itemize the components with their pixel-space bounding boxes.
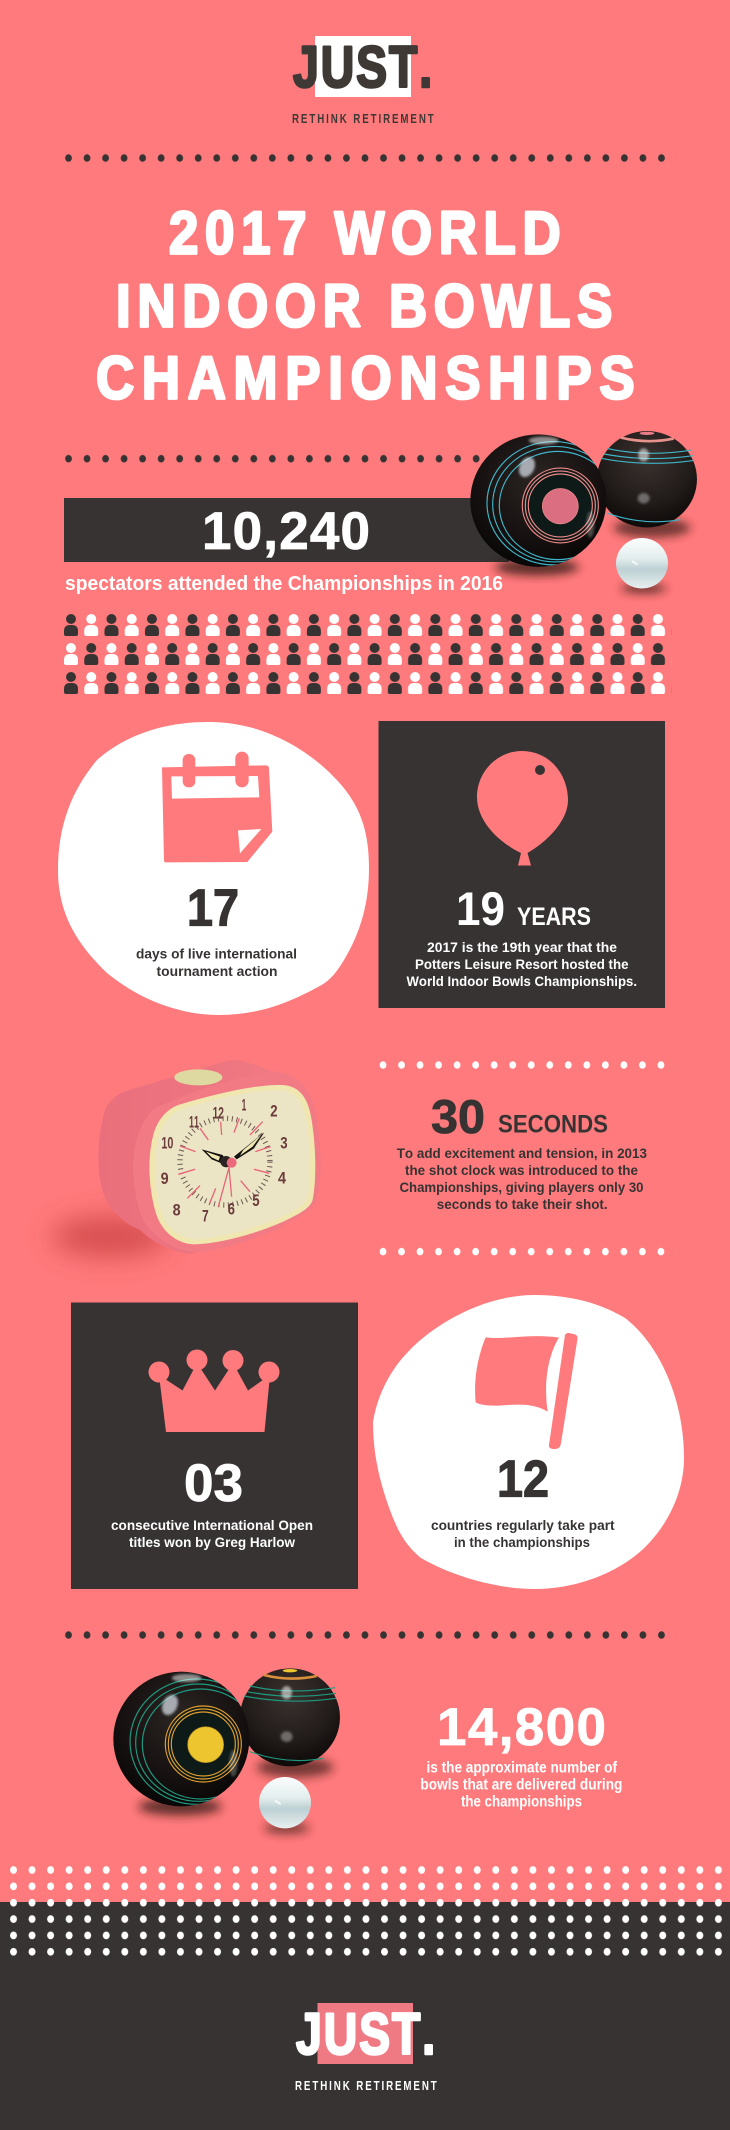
- clock image: 2: [270, 1102, 278, 1121]
- text: Potters Leisure Resort: Potters Leisure Resort hosted the: [415, 957, 629, 972]
- heading: 19 years: 19: [456, 882, 505, 935]
- logo: footer: RETHINK RETIREMENT: [295, 2080, 437, 2093]
- clock image: 5: [252, 1191, 260, 1210]
- text: bowls delivered: the championships: [461, 1794, 582, 1810]
- dotted divider: [65, 451, 491, 467]
- text: days of action: tournament action: [156, 964, 278, 979]
- heading: 30 seconds: [431, 1090, 608, 1143]
- title: [96, 199, 635, 411]
- text: shot clock: To add excitement and tension, in 2013: [397, 1146, 647, 1161]
- panel: 19 years: [378, 721, 665, 1008]
- clock image: 11: [189, 1112, 199, 1131]
- icon: crown: [148, 1350, 280, 1432]
- panel: 03 titles: [71, 1302, 358, 1589]
- clock image: 7: [202, 1206, 209, 1225]
- icon: calendar: [162, 752, 272, 862]
- logo: header: RETHINK RETIREMENT: [292, 113, 434, 126]
- text: shot clock: Championships, giving players only 30: [400, 1180, 644, 1195]
- people pictogram rows: [64, 614, 671, 694]
- icon: flag: [475, 1333, 578, 1449]
- dotted divider: [65, 1627, 677, 1643]
- dotted divider: [380, 1057, 676, 1073]
- clock image: 1: [242, 1096, 246, 1115]
- dotted divider: [380, 1244, 676, 1260]
- heading: 30 seconds: SECONDS: [498, 1110, 608, 1138]
- text: bowls delivered: is the approximate number of: [426, 1760, 618, 1776]
- text: shot clock: [397, 1146, 647, 1212]
- text: days of action: days of live international: [136, 946, 297, 962]
- clock image: 10: [161, 1134, 173, 1153]
- clock image: 3: [280, 1134, 288, 1153]
- logo: footer: JUST.: [296, 2002, 435, 2067]
- text: countries: [431, 1518, 615, 1550]
- title: INDOOR BOWLS: [116, 272, 612, 339]
- clock image: 8: [173, 1200, 181, 1219]
- bowls image: yellow and green set: [113, 1668, 340, 1834]
- text: days of action: [136, 946, 297, 979]
- number: 14,800: 14,800: [437, 1698, 606, 1757]
- banner: spectators figure: [64, 498, 509, 562]
- bowls image: pink and blue set: [470, 431, 697, 594]
- heading: 19 years: YEARS: [517, 903, 591, 931]
- text: shot clock: seconds to take their shot.: [437, 1197, 608, 1212]
- clock image: 6: [228, 1200, 235, 1219]
- number: 17: 17: [187, 880, 239, 938]
- icon: balloon: [477, 751, 568, 866]
- panel: 12 countries: [373, 1295, 684, 1589]
- number: 03: 03: [184, 1454, 243, 1513]
- heading: 19 years: [456, 882, 591, 935]
- panel: 17 days: [58, 722, 369, 1015]
- dot grid: [10, 1862, 730, 1960]
- number: 12: 12: [497, 1450, 549, 1508]
- title: 2017 WORLD: [169, 199, 561, 266]
- clock image: 4: [278, 1168, 287, 1187]
- text: Greg Harlow: titles won by Greg Harlow: [129, 1535, 295, 1550]
- text: countries: in the championships: [454, 1535, 590, 1550]
- clock image: [52, 1060, 321, 1257]
- text: countries: countries regularly take part: [431, 1518, 615, 1533]
- text: Potters Leisure Resort: 2017 is the 19th year that the: [427, 940, 618, 955]
- dotted divider: [65, 150, 677, 166]
- text: Greg Harlow: [111, 1518, 313, 1550]
- text: bowls delivered: [420, 1760, 622, 1810]
- text: Potters Leisure Resort: [406, 940, 637, 989]
- text: Potters Leisure Resort: World Indoor Bowls Championships.: [406, 974, 637, 989]
- clock image: 9: [161, 1169, 169, 1188]
- text: shot clock: the shot clock was introduced to the: [405, 1163, 638, 1178]
- text: bowls delivered: bowls that are delivered during: [420, 1776, 622, 1794]
- clock image: 12: [213, 1103, 224, 1122]
- title: CHAMPIONSHIPS: [96, 344, 635, 411]
- banner: spectators figure: 10,240: [202, 502, 370, 561]
- logo: header: JUST.: [293, 35, 432, 100]
- text: Greg Harlow: consecutive International Open: [111, 1518, 313, 1533]
- caption: spectators: spectators attended the Championships in 2016: [65, 573, 503, 595]
- footer band: [0, 1902, 730, 2130]
- heading: 30 seconds: 30: [431, 1090, 485, 1143]
